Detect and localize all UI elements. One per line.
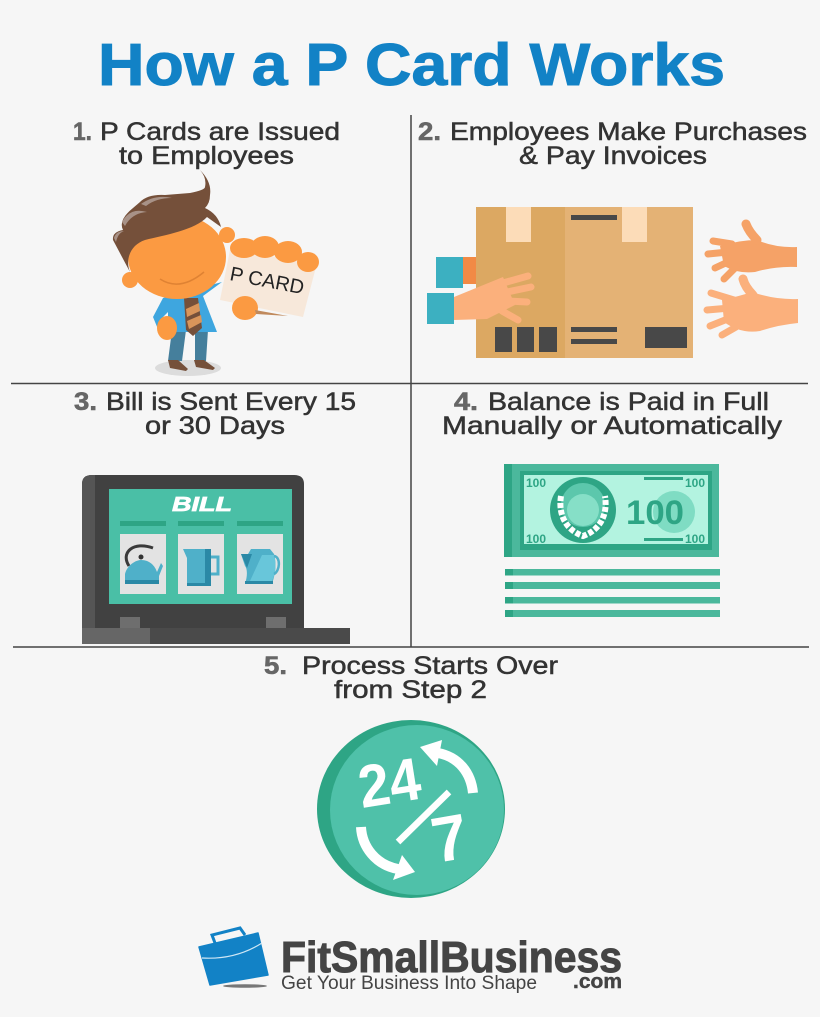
- corner values: 100: [685, 532, 705, 546]
- heading: step 2: Employees Make Purchases: [450, 118, 807, 146]
- corner values: 100: [685, 476, 705, 490]
- icon: stack of money: [504, 464, 720, 617]
- icon: briefcase: [199, 928, 268, 988]
- heading: step 1: [73, 118, 340, 170]
- heading: step 5: Process Starts Over: [302, 652, 558, 680]
- panel: step 5: [264, 652, 558, 898]
- tagline: Get Your Business Into Shape: [281, 973, 537, 994]
- heading: step 4: 4.: [454, 388, 478, 416]
- heading: step 4: Manually or Automatically: [442, 412, 783, 440]
- heading: step 4: [442, 388, 783, 440]
- logo: Fit Small Business: [199, 928, 622, 994]
- bill value: 100: [626, 494, 684, 532]
- heading: step 1: 1.: [73, 118, 92, 146]
- arrow: clockwise bottom: [361, 827, 398, 869]
- icon: kettle: [125, 546, 163, 584]
- corner values: 100: [526, 476, 546, 490]
- icon: 24/7 circle: [317, 720, 505, 898]
- heading: step 3: or 30 Days: [145, 412, 285, 440]
- icon: 24/7 circle: 7: [426, 800, 473, 877]
- screen title: BILL: [172, 494, 232, 516]
- heading: step 5: [264, 652, 558, 704]
- icon: cardboard box and hands: [427, 207, 798, 358]
- heading: step 2: 2.: [418, 118, 441, 146]
- heading: step 3: Bill is Sent Every 15: [106, 388, 356, 416]
- corner values: 100: [526, 532, 546, 546]
- card label: P CARD: [228, 263, 306, 299]
- icon: jug: [183, 549, 218, 586]
- panel: step 4: [442, 388, 783, 617]
- left hand: [454, 276, 531, 320]
- icon: 24/7 circle: 24: [354, 745, 426, 821]
- heading: step 1: P Cards are Issued: [100, 118, 340, 146]
- panel: step 3: [74, 388, 356, 644]
- heading: step 4: Balance is Paid in Full: [488, 388, 769, 416]
- icon: teapot: [241, 549, 279, 584]
- domain: .com: [573, 971, 622, 993]
- panel: step 2: [418, 118, 807, 358]
- upper right hand: [708, 224, 797, 279]
- arrow: clockwise top: [438, 753, 473, 793]
- wordmark: FitSmallBusiness: [281, 933, 622, 982]
- corner values: [526, 476, 705, 546]
- heading: step 2: & Pay Invoices: [519, 142, 707, 170]
- heading: step 3: [74, 388, 356, 440]
- heading: step 5: 5.: [264, 652, 287, 680]
- heading: step 3: 3.: [74, 388, 97, 416]
- icon: man holding P card: [113, 170, 319, 376]
- icon: laptop showing bill: [82, 475, 350, 644]
- heading: step 2: [418, 118, 807, 170]
- panel: step 1: [73, 118, 340, 376]
- title: How a P Card Works: [98, 32, 725, 98]
- lower right hand: [707, 279, 798, 335]
- heading: step 1: to Employees: [119, 142, 294, 170]
- heading: step 5: from Step 2: [334, 676, 487, 704]
